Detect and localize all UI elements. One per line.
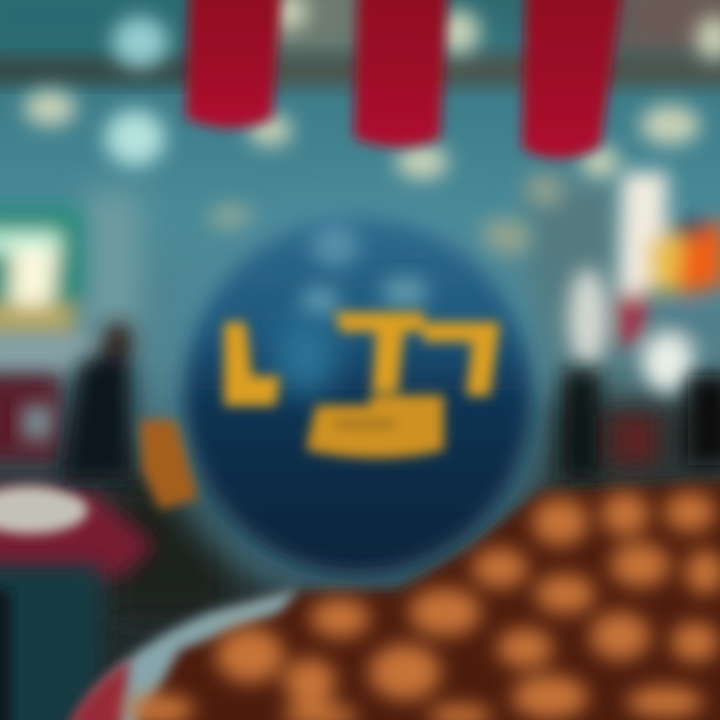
globe	[147, 190, 557, 600]
left red stand and table	[0, 375, 155, 720]
globe lettering	[224, 312, 500, 458]
orange sign left of globe	[140, 420, 198, 510]
ceiling lights	[24, 0, 720, 258]
food pieces	[126, 492, 720, 720]
plate of food	[65, 480, 720, 720]
dark figures right	[562, 370, 720, 480]
red banners	[186, 0, 624, 159]
flags right	[568, 172, 720, 392]
neon sign left	[0, 210, 100, 375]
dark figure left	[60, 322, 133, 482]
